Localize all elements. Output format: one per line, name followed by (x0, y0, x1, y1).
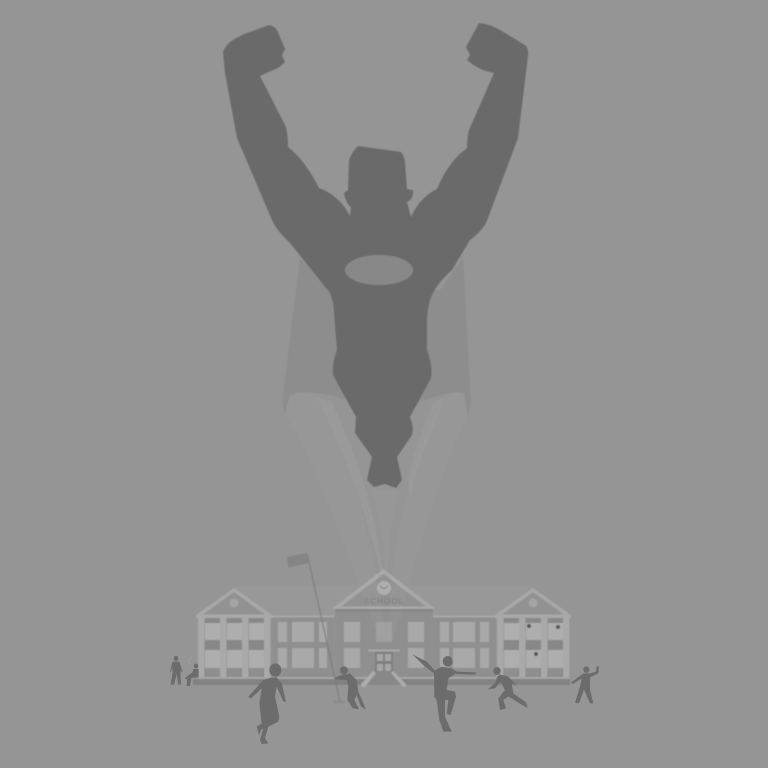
people on the left of the courtyard (170, 656, 366, 744)
right pavilion (495, 588, 571, 678)
left beam highlight (317, 398, 385, 590)
left wing wall (272, 617, 334, 678)
waving person (571, 666, 599, 703)
people on the right of the courtyard (412, 654, 599, 732)
door (375, 652, 393, 672)
columns (198, 618, 270, 678)
center pediment (333, 569, 434, 612)
door canopy (368, 650, 400, 652)
bays (497, 618, 570, 678)
wing roof lines (270, 616, 497, 618)
running woman (248, 663, 286, 744)
columns (497, 618, 570, 678)
right beam highlight (409, 398, 445, 495)
flag (286, 553, 308, 568)
left wing windows (278, 622, 327, 668)
right wing wall (433, 617, 496, 678)
right beam (387, 393, 468, 642)
bullet holes (527, 624, 560, 656)
right wing windows (440, 622, 489, 668)
left beam (285, 392, 386, 640)
cape (282, 258, 471, 416)
clock (377, 581, 391, 595)
left pavilion (196, 588, 272, 678)
pole (308, 555, 340, 702)
ground ledge (198, 677, 570, 679)
bays (198, 618, 271, 678)
pole base (333, 700, 345, 704)
standing person (170, 656, 183, 685)
light beams from cape to school (285, 392, 468, 642)
flagpole (286, 553, 345, 704)
dancer (412, 654, 477, 732)
school building (193, 569, 571, 687)
back roof band (236, 586, 532, 616)
running child (488, 667, 528, 710)
center block wall (335, 609, 433, 678)
chest emblem (345, 255, 413, 285)
sitting person (185, 657, 199, 686)
center light (372, 490, 397, 580)
school sign: SCHOOL (364, 596, 404, 606)
foundation (193, 679, 570, 685)
pediment (495, 588, 571, 618)
center windows (344, 622, 424, 668)
front steps (361, 671, 406, 687)
superhero silhouette (223, 23, 528, 488)
person pushing flagpole (335, 666, 366, 709)
pediment (196, 588, 272, 618)
